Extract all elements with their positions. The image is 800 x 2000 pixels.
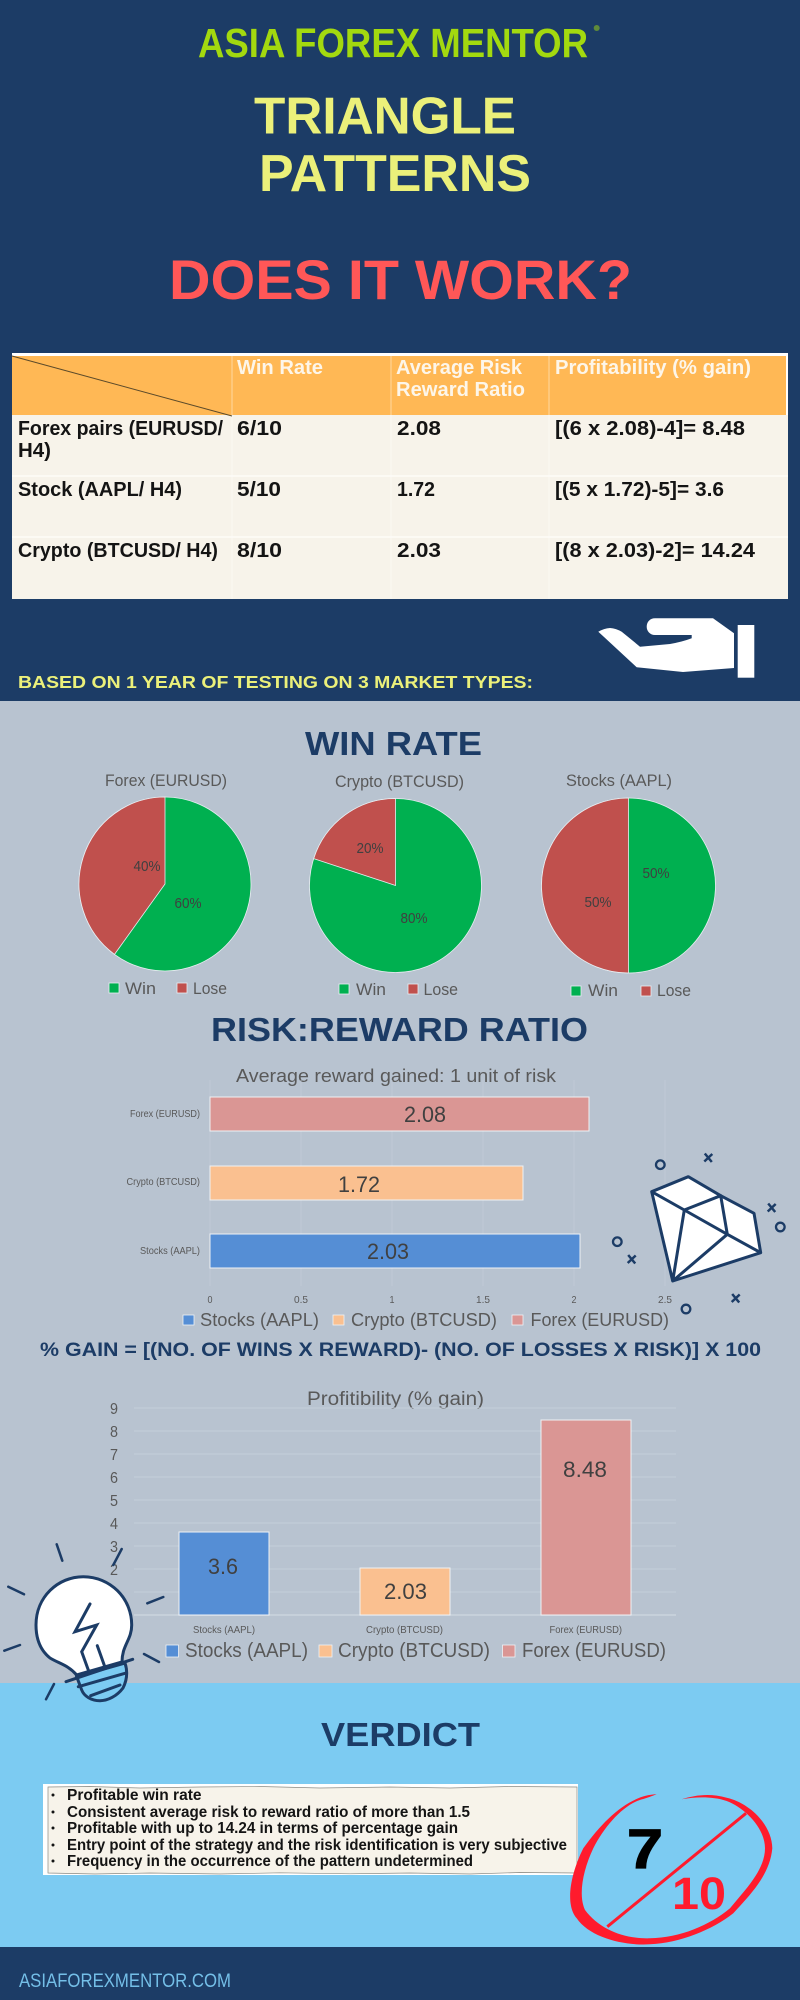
footer website: ASIAFOREXMENTOR.COM [19, 1971, 231, 1992]
bar chart: average reward: Forex (EURUSD) [530, 1310, 669, 1330]
bar chart: average reward: 1.5 [476, 1294, 490, 1306]
subheading: based on testing: BASED ON 1 YEAR OF TESTING ON 3 MARKET TYPES: [18, 672, 533, 692]
panel: verdict [0, 1683, 800, 1947]
pie chart: forex: Lose [193, 979, 227, 998]
bar chart: profitability: Profitibility (% gain) [307, 1389, 484, 1410]
bar chart: profitability: Stocks (AAPL) [193, 1624, 255, 1636]
icon: diamond with sparkles [613, 1154, 785, 1313]
bar chart: average reward: 1.72 [338, 1172, 380, 1197]
results table: [(5 x 1.72)-5]= 3.6 [555, 479, 724, 501]
pie chart: forex [79, 771, 251, 998]
results table: Forex pairs (EURUSD/ [18, 418, 223, 440]
bar chart: profitability: 9 [110, 1401, 118, 1418]
bar chart: average reward: Stocks (AAPL) [200, 1310, 319, 1330]
bar chart: average reward: 0.5 [294, 1294, 308, 1306]
bar chart: profitability: 2 [110, 1562, 118, 1579]
bar chart: average reward: 1 [390, 1294, 395, 1306]
pie chart: stocks [542, 771, 716, 1000]
bar chart: average reward: Average reward gained: 1 unit of risk [236, 1065, 557, 1086]
pie chart: forex: 40% [134, 858, 160, 875]
results table: H4) [18, 440, 51, 462]
heading: does it work: DOES IT WORK? [169, 248, 632, 311]
bar chart: profitability: 3.6 [208, 1554, 238, 1579]
results table [12, 353, 788, 599]
panel: charts [0, 701, 800, 1683]
pie chart: stocks: Stocks (AAPL) [566, 771, 672, 790]
bar chart: profitability: 2.03 [384, 1579, 427, 1604]
pie chart: crypto: Crypto (BTCUSD) [335, 772, 464, 791]
bar chart: profitability: Stocks (AAPL) [185, 1640, 308, 1662]
results table: Win Rate [237, 357, 323, 379]
heading: risk reward ratio: RISK:REWARD RATIO [211, 1012, 588, 1049]
bar chart: profitability: 5 [110, 1493, 118, 1510]
bar chart: profitability: 8.48 [563, 1457, 607, 1482]
title: PATTERNS [259, 145, 531, 203]
pie chart: crypto: Lose [424, 980, 458, 999]
bar chart: profitability: Crypto (BTCUSD) [366, 1624, 443, 1636]
pie chart: stocks: 50% [584, 894, 612, 911]
bar chart: average reward: Forex (EURUSD) [130, 1108, 200, 1120]
bar chart: average reward: Crypto (BTCUSD) [126, 1176, 200, 1188]
logo: Asia Forex Mentor: ASIA FOREX MENTOR [198, 20, 588, 66]
pie chart: stocks: Lose [657, 981, 691, 1000]
pie chart: crypto: 80% [400, 910, 428, 927]
score badge: 7 out of 10: 10 [672, 1868, 726, 1919]
panel: footer [0, 1947, 800, 2000]
score badge: 7 out of 10 [570, 1794, 772, 1945]
pie chart: forex: Forex (EURUSD) [105, 771, 227, 790]
bar chart: average reward: 0 [208, 1294, 213, 1306]
heading: verdict: VERDICT [321, 1717, 481, 1754]
results table: 5/10 [237, 479, 281, 501]
bar chart: average reward: 2.5 [658, 1294, 672, 1306]
panel: header [0, 0, 800, 701]
results table: Crypto (BTCUSD/ H4) [18, 540, 218, 562]
bar chart: profitability: 7 [110, 1447, 118, 1464]
pie chart: crypto [310, 772, 482, 999]
bar chart: profitability: 4 [110, 1516, 118, 1533]
verdict list box: Frequency in the occurrence of the pattern undetermined [67, 1853, 473, 1870]
results table: [(6 x 2.08)-4]= 8.48 [555, 418, 745, 440]
bar chart: average reward: 2.08 [404, 1102, 446, 1127]
pie chart: forex: 60% [174, 895, 202, 912]
verdict list box: Entry point of the strategy and the risk identification is very subjective [67, 1837, 567, 1854]
verdict list box: Profitable win rate [67, 1787, 202, 1804]
pie chart: crypto: Win [356, 980, 386, 999]
icon: light bulb [4, 1544, 163, 1701]
results table: [(8 x 2.03)-2]= 14.24 [555, 540, 756, 562]
verdict list box [43, 1784, 578, 1875]
title [254, 88, 531, 203]
pie chart: forex: Win [125, 979, 156, 998]
icon: open hand [598, 618, 754, 678]
results table: Profitability (% gain) [555, 357, 751, 379]
results table: 2.03 [397, 540, 441, 562]
bar chart: profitability: Crypto (BTCUSD) [338, 1640, 490, 1662]
pie chart: stocks: 50% [642, 865, 670, 882]
heading: win rate: WIN RATE [305, 726, 482, 763]
bar chart: average reward: Stocks (AAPL) [140, 1245, 200, 1257]
verdict list box: Profitable with up to 14.24 in terms of percentage gain [67, 1820, 458, 1837]
bar chart: average reward: Crypto (BTCUSD) [351, 1310, 497, 1330]
results table: Reward Ratio [396, 379, 525, 401]
title: TRIANGLE [254, 88, 516, 146]
bar chart: profitability: 3 [110, 1539, 118, 1556]
bar chart: average reward: 2 [572, 1294, 577, 1306]
results table: 8/10 [237, 540, 282, 562]
bar chart: profitability: 6 [110, 1470, 118, 1487]
bar chart: profitability [110, 1389, 676, 1662]
results table: Stock (AAPL/ H4) [18, 479, 182, 501]
verdict list box: Consistent average risk to reward ratio of more than 1.5 [67, 1804, 470, 1821]
results table: 2.08 [397, 418, 441, 440]
formula: percent gain: % GAIN = [(NO. OF WINS X REWARD)- (NO. OF LOSSES X RISK)] X 100 [40, 1340, 761, 1361]
bar chart: profitability: Forex (EURUSD) [550, 1624, 622, 1636]
pie chart: stocks: Win [588, 981, 618, 1000]
pie chart: crypto: 20% [356, 840, 384, 857]
bar chart: profitability: 8 [110, 1424, 118, 1441]
results table: 1.72 [397, 479, 435, 501]
results table: 6/10 [237, 418, 282, 440]
results table: Average Risk [396, 357, 523, 379]
score badge: 7 out of 10: 7 [627, 1817, 663, 1880]
bar chart: average reward [126, 1065, 672, 1330]
bar chart: average reward: 2.03 [367, 1239, 409, 1264]
bar chart: profitability: Forex (EURUSD) [522, 1640, 666, 1662]
